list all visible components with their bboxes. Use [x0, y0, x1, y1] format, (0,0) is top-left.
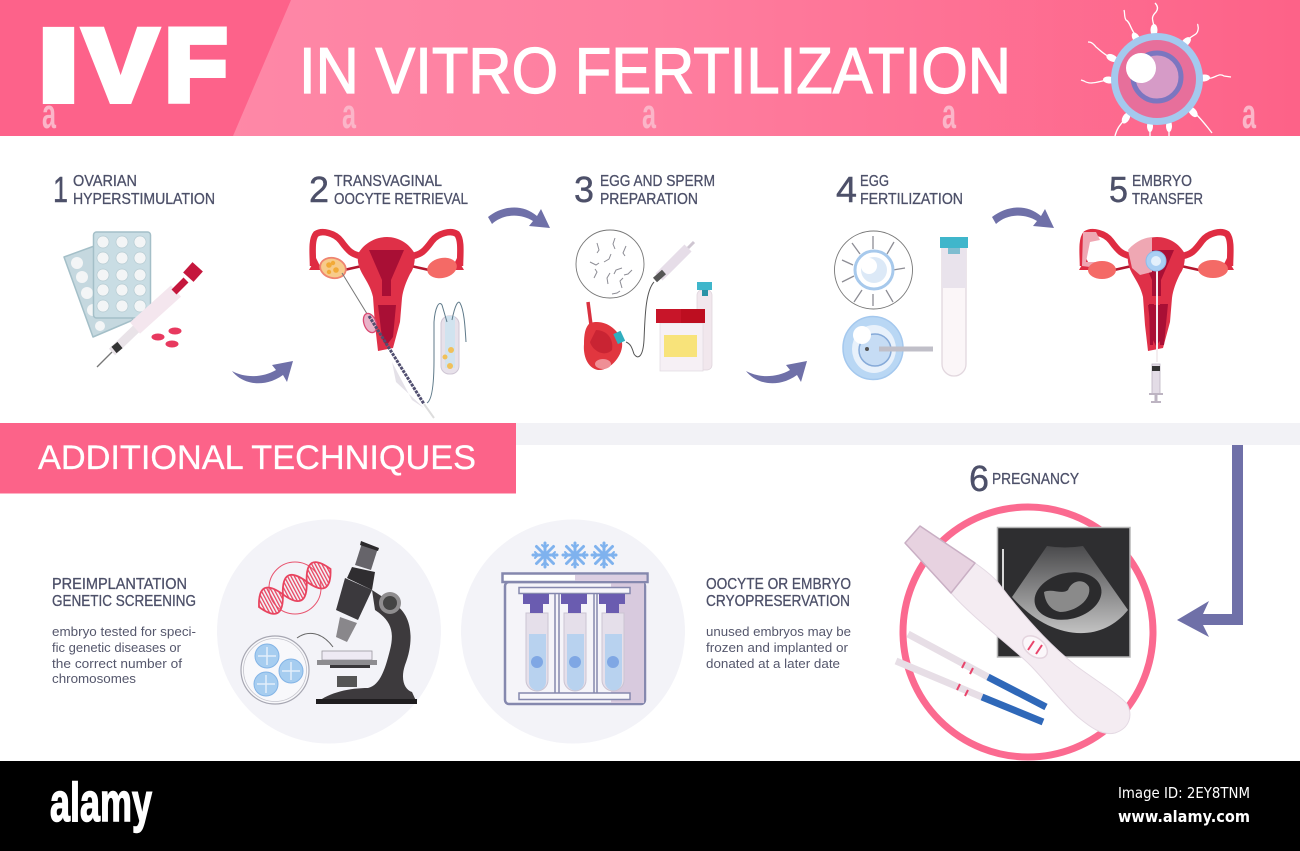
arrow: step 2 to 3	[488, 207, 550, 228]
step 3 heading: PREPARATION	[600, 191, 698, 208]
title: In Vitro Fertilization: IN VITRO FERTILIZATION	[299, 34, 1011, 107]
text block: preimplantation genetic screening: chromosomes	[52, 671, 137, 686]
icon: cryo storage container	[502, 574, 648, 704]
title: IVF: V	[84, 8, 157, 122]
step 4 heading: 4	[836, 169, 857, 210]
arrow: step 5 down to step 6	[1177, 445, 1243, 637]
footer url: www.alamy.com	[1118, 807, 1250, 826]
header banner	[0, 0, 1300, 137]
step 2: transvaginal oocyte retrieval	[309, 169, 468, 418]
icon: DNA helix	[252, 557, 337, 619]
icon: test tube with eggs	[427, 302, 466, 403]
step 6 heading: PREGNANCY	[992, 471, 1079, 488]
icon: pregnancy test strips	[896, 634, 1046, 722]
step 1 heading: HYPERSTIMULATION	[73, 191, 215, 208]
stock footer	[0, 761, 1300, 851]
icon: sample jar and tube	[656, 282, 712, 371]
icon: ovary with clip	[584, 302, 625, 370]
title: IVF	[38, 8, 227, 122]
watermark marks: a	[1242, 90, 1256, 137]
icon: microscope	[316, 541, 417, 704]
section strip	[516, 423, 1300, 445]
text block: cryopreservation: donated at a later date	[706, 656, 840, 671]
footer logo: alamy	[50, 771, 152, 833]
text block: preimplantation genetic screening: GENETIC SCREENING	[52, 593, 196, 610]
step 1 heading: OVARIAN	[73, 173, 137, 190]
step 6: pregnancy	[896, 458, 1153, 757]
icon: transfer syringe	[1149, 364, 1163, 403]
step 2 heading: TRANSVAGINAL	[334, 173, 442, 190]
icon: sperm injection into egg	[843, 316, 933, 380]
text block: cryopreservation	[706, 576, 851, 671]
title: IVF: F	[165, 8, 227, 122]
icon: pregnancy test stick	[905, 526, 1130, 734]
icon: egg and sperm circle	[834, 231, 912, 309]
text block: cryopreservation: frozen and implanted or	[706, 640, 849, 655]
step 1 heading: 1	[53, 169, 68, 210]
step 6 heading: 6	[969, 458, 989, 499]
step 1 heading	[53, 169, 215, 210]
step 2 heading	[309, 169, 468, 210]
icon: egg with sperm	[1081, 3, 1231, 136]
watermark marks: a	[342, 90, 356, 137]
watermark marks: a	[642, 90, 656, 137]
icon: blister packs	[64, 232, 150, 337]
icon: uterus with stimulated ovary	[309, 232, 464, 351]
step 3 heading: 3	[574, 169, 594, 210]
pink ring	[903, 507, 1153, 757]
text block: preimplantation genetic screening	[52, 576, 196, 686]
IVF badge panel	[0, 0, 291, 136]
icon: tall culture tube	[940, 237, 968, 376]
watermark marks: a	[42, 90, 56, 137]
step 3 heading	[574, 169, 715, 210]
step 5 heading: 5	[1109, 169, 1128, 210]
text block: preimplantation genetic screening: PREIMPLANTATION	[52, 576, 187, 593]
icon: snowflakes	[533, 543, 616, 567]
icon: ultrasound scan	[998, 528, 1130, 657]
step 4 heading: FERTILIZATION	[860, 191, 963, 208]
text block: preimplantation genetic screening: fic genetic diseases or	[52, 640, 182, 655]
step 4: egg fertilization	[834, 169, 968, 380]
panel: cryopreservation illustration	[461, 520, 685, 744]
icon: syringe with tube	[626, 242, 694, 357]
arrow: step 3 to 4	[746, 361, 807, 383]
text block: preimplantation genetic screening: embryo tested for speci-	[52, 624, 196, 639]
step 3: egg and sperm preparation	[574, 169, 715, 371]
step 2 heading: 2	[309, 169, 329, 210]
icon: sperm sample circle	[576, 230, 644, 298]
step 5: embryo transfer	[1079, 169, 1234, 403]
title: IVF: I	[38, 8, 79, 122]
step 5 heading	[1109, 169, 1203, 210]
heading: additional techniques	[0, 423, 516, 494]
step 3 heading: EGG AND SPERM	[600, 173, 715, 190]
step 4 heading: EGG	[860, 173, 889, 190]
step 5 heading: EMBRYO	[1132, 173, 1192, 190]
icon: retrieval probe	[342, 273, 434, 418]
footer image id: Image ID: 2EY8TNM	[1118, 784, 1250, 802]
text block: cryopreservation: OOCYTE OR EMBRYO	[706, 576, 851, 593]
panel: genetic screening illustration	[217, 520, 441, 744]
step 6 heading	[969, 458, 1079, 499]
text block: cryopreservation: unused embryos may be	[706, 624, 851, 639]
icon: pink pills	[152, 328, 182, 348]
icon: petri dish with cells	[241, 633, 333, 704]
step 4 heading	[836, 169, 963, 210]
arrow: step 1 to 2	[232, 361, 293, 383]
icon: uterus with embryo	[1079, 232, 1234, 362]
watermark marks	[42, 90, 1256, 137]
icon: hormone injection pen	[97, 262, 203, 367]
text block: preimplantation genetic screening: the correct number of	[52, 656, 182, 671]
arrow: step 4 to 5	[992, 207, 1054, 228]
heading: additional techniques: ADDITIONAL TECHNIQUES	[38, 439, 476, 477]
step 1: ovarian hyperstimulation	[53, 169, 215, 367]
step 5 heading: TRANSFER	[1132, 191, 1203, 208]
text block: cryopreservation: CRYOPRESERVATION	[706, 593, 850, 610]
watermark marks: a	[942, 90, 956, 137]
step 2 heading: OOCYTE RETRIEVAL	[334, 191, 468, 208]
